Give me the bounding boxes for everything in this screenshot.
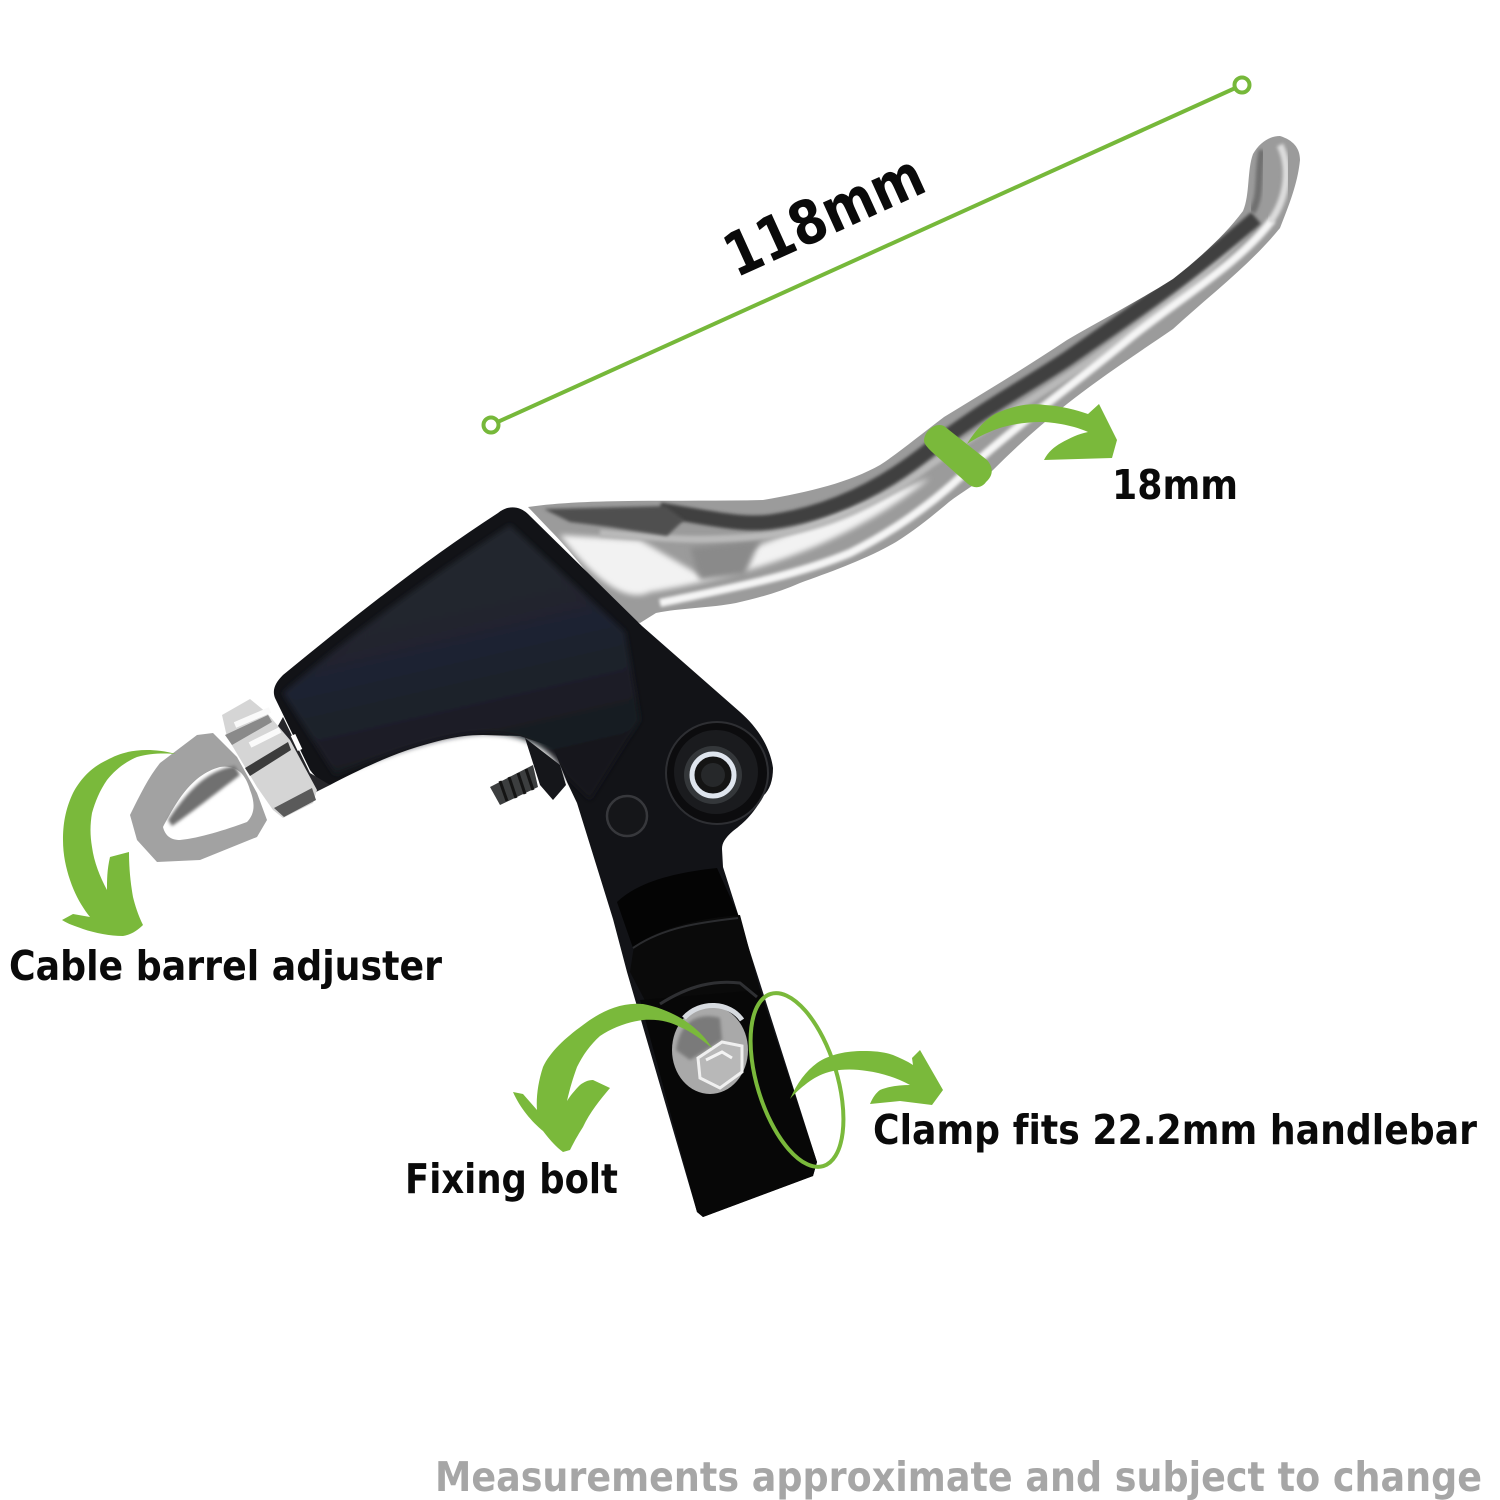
- threaded stud: [490, 738, 566, 805]
- small rivet: [607, 796, 647, 836]
- lever blade: chrome handle: [528, 136, 1300, 623]
- arrow: fixing bolt: [513, 1004, 712, 1152]
- label: Fixing bolt: Fixing bolt: [405, 1155, 618, 1203]
- lever body: black housing: [274, 507, 817, 1217]
- cable barrel adjuster: [130, 699, 330, 862]
- label: Cable barrel adjuster: Cable barrel adjuster: [9, 942, 443, 990]
- lever width marker and arrow: [924, 404, 1117, 487]
- clamp ellipse: [732, 982, 862, 1178]
- pivot bolt: [666, 722, 768, 824]
- label: 18mm: 18mm: [1112, 461, 1238, 509]
- dimension line: 118mm: [484, 78, 1250, 432]
- clamp fixing bolt: [672, 1005, 748, 1094]
- arrow: clamp: [790, 1050, 943, 1105]
- label: 118mm: 118mm: [713, 140, 935, 292]
- arrow: cable barrel adjuster: [62, 750, 176, 936]
